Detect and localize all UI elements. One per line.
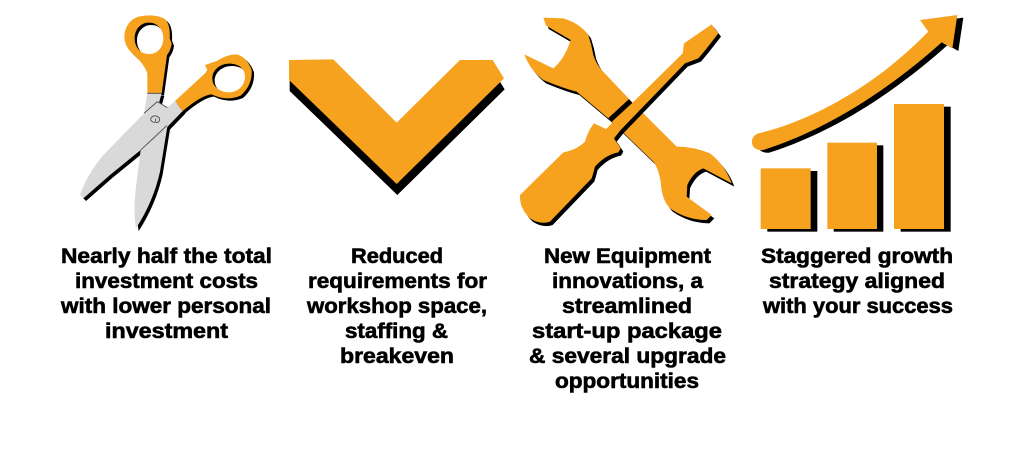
icon: rising bars with arrow xyxy=(752,15,963,232)
panel: new equipment xyxy=(520,18,734,393)
text: requirements caption: requirements for xyxy=(308,270,487,293)
panel: lower investment costs xyxy=(60,15,272,343)
text: requirements caption: workshop space, xyxy=(306,295,487,318)
text: costs caption xyxy=(60,245,272,343)
text: costs caption: investment costs xyxy=(75,270,258,293)
icon: scissors xyxy=(80,15,254,231)
text: equipment caption: streamlined xyxy=(562,295,692,318)
text: growth caption xyxy=(761,245,953,318)
text: equipment caption: innovations, a xyxy=(552,270,703,293)
panel: reduced requirements xyxy=(289,59,505,368)
text: requirements caption: Reduced xyxy=(351,245,443,268)
text: costs caption: Nearly half the total xyxy=(61,245,272,268)
text: costs caption: with lower personal xyxy=(60,295,271,318)
text: equipment caption: New Equipment xyxy=(544,245,711,268)
text: equipment caption: start-up package xyxy=(532,320,722,343)
panel: staggered growth xyxy=(752,15,963,318)
icon: check chevron xyxy=(289,59,505,195)
text: equipment caption xyxy=(529,245,726,393)
text: equipment caption: & several upgrade xyxy=(529,345,726,368)
text: growth caption: strategy aligned xyxy=(769,270,945,293)
text: growth caption: Staggered growth xyxy=(761,245,953,268)
text: requirements caption: staffing & xyxy=(345,320,448,343)
text: requirements caption: breakeven xyxy=(340,345,454,368)
text: growth caption: with your success xyxy=(762,295,953,318)
icon: crossed wrench and screwdriver xyxy=(520,18,734,226)
text: costs caption: investment xyxy=(105,320,228,343)
text: requirements caption xyxy=(306,245,487,368)
text: equipment caption: opportunities xyxy=(555,370,699,393)
